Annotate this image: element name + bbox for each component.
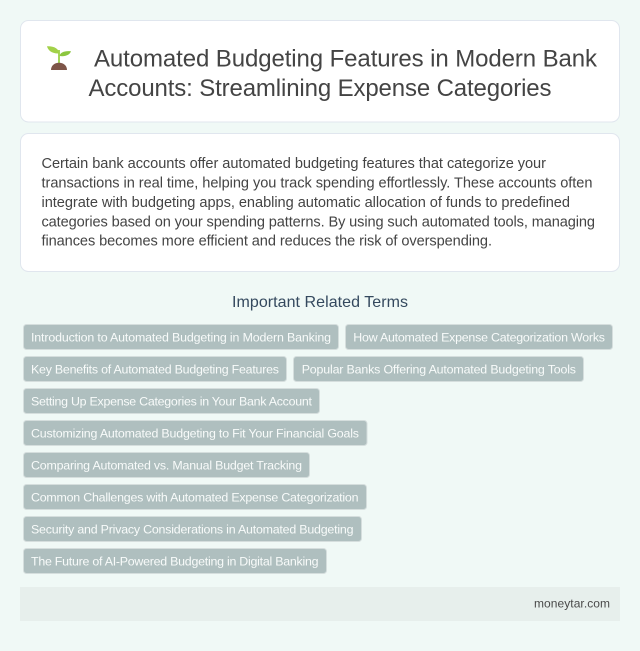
tag: Security and Privacy Considerations in Automated Budgeting [31,522,354,536]
tag [346,324,612,350]
text block: description paragraph: integrate with budgeting apps, enabling automatic allocation of funds to predefined [42,195,570,211]
icon: sprout [47,46,71,70]
text block: description paragraph: Certain bank accounts offer automated budgeting features that categorize your [42,156,546,172]
tag [24,452,310,478]
tag [24,388,320,414]
footer [20,587,620,621]
footer source text: moneytar.com [534,597,610,611]
tag: Common Challenges with Automated Expense Categorization [31,490,359,504]
title: Accounts: Streamlining Expense Categories [88,75,552,102]
tag: Introduction to Automated Budgeting in Modern Banking [31,330,331,344]
tag [24,484,366,510]
tag [24,516,362,542]
panel: description [20,134,620,272]
tag: Setting Up Expense Categories in Your Bank Account [31,394,313,408]
tag [24,548,326,574]
heading: related terms: Important Related Terms [232,294,408,311]
tag: How Automated Expense Categorization Works [353,330,605,344]
tag [24,356,286,382]
panel: title card [20,20,620,122]
text block: description paragraph: categories based on your spending patterns. By using such automated tools, managing [42,214,595,230]
text block: description paragraph: finances becomes more efficient and reduces the risk of overspending. [42,234,492,250]
tag: Key Benefits of Automated Budgeting Features [31,362,279,376]
title [88,46,598,102]
tag list: related terms [24,324,612,574]
text block: description paragraph: transactions in real time, helping you track spending effortlessly. These accounts often [42,175,592,191]
text block: description paragraph [42,156,595,250]
tag [24,324,338,350]
tag: The Future of AI-Powered Budgeting in Digital Banking [31,554,319,568]
tag: Popular Banks Offering Automated Budgeting Tools [302,362,576,376]
title: Automated Budgeting Features in Modern Bank [94,46,598,72]
tag [24,420,367,446]
tag [294,356,584,382]
tag: Customizing Automated Budgeting to Fit Your Financial Goals [31,426,359,440]
tag: Comparing Automated vs. Manual Budget Tracking [31,458,302,472]
